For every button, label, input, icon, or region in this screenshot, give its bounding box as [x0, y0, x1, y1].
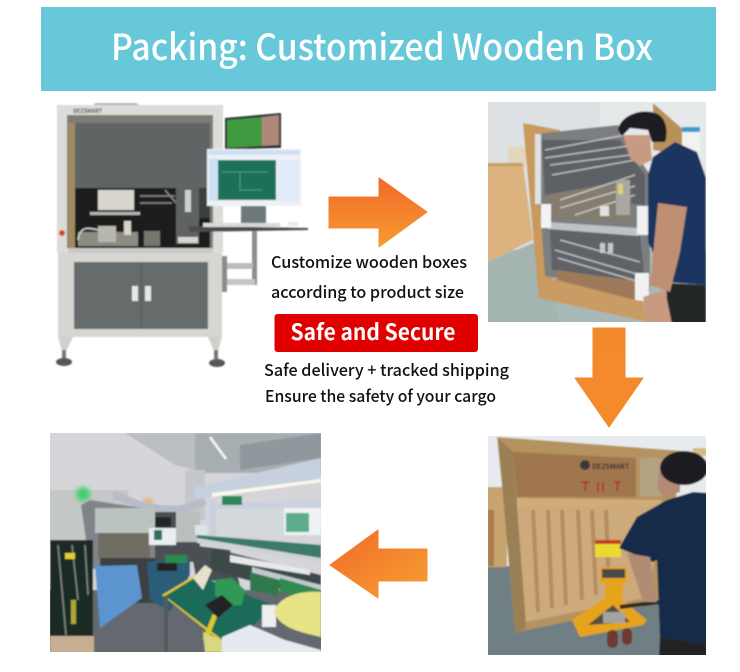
red label: safe and secure: Safe and Secure [290, 315, 456, 347]
photo: wooden crate on pallet jack [486, 434, 708, 658]
text: customize wooden boxes: Customize wooden boxes [271, 249, 467, 273]
photo: factory workshop [48, 431, 323, 654]
crate logo: DEZSMART [592, 462, 630, 472]
arrow: left [330, 530, 427, 598]
photo: soldering machine product [56, 103, 308, 367]
text: safe delivery: Safe delivery + tracked shipping [264, 357, 509, 381]
title banner [41, 7, 716, 91]
title: Packing: Customized Wooden Box [111, 19, 653, 71]
machine logo: DEZSMART [73, 107, 103, 115]
arrow: down [575, 328, 643, 427]
arrow: right [329, 178, 427, 247]
text: according to product size: according to product size [271, 279, 464, 303]
text: ensure safety: Ensure the safety of your cargo [265, 383, 496, 407]
photo: wrapping the machine [486, 100, 708, 324]
